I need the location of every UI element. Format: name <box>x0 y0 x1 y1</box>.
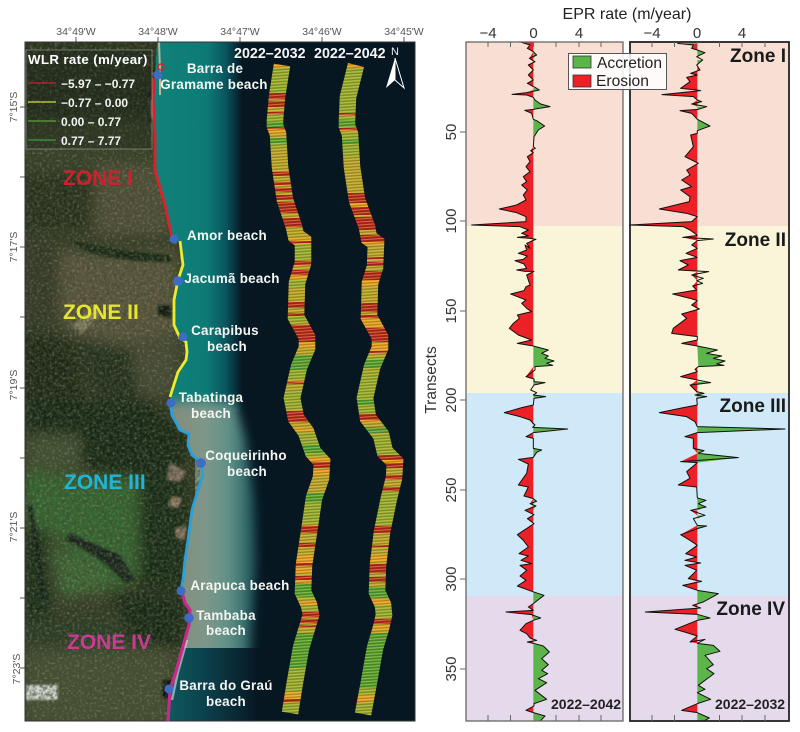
panel tag: 2022–2042 <box>551 696 621 712</box>
beach labels: beach <box>206 694 246 709</box>
beach labels: Gramame beach <box>160 77 268 92</box>
chart zone labels: Zone I <box>730 46 786 67</box>
zone labels on map: ZONE I <box>63 167 133 190</box>
zone labels on map: ZONE II <box>63 301 139 324</box>
panel tag: 2022–2032 <box>715 696 785 712</box>
beach labels: Jacumã beach <box>184 271 280 286</box>
frame and ticks <box>466 42 623 721</box>
water: southern strip <box>170 648 250 720</box>
longitude labels: 34°46'W <box>302 26 342 38</box>
chart legend: Erosion <box>596 73 649 90</box>
shoreline zone III <box>170 402 203 590</box>
map panel: satellite image of the coast <box>20 40 415 725</box>
legend: WLR rate: −0.77 – 0.00 <box>61 96 128 110</box>
chart title: EPR rate (m/year) <box>563 6 691 23</box>
latitude labels: 7°23'S <box>11 654 23 684</box>
chart x tick labels: −4 <box>479 25 497 42</box>
beach labels: Barra de <box>187 61 243 76</box>
chart x tick labels: 0 <box>693 25 701 42</box>
chart frame ticks: longitude <box>76 37 404 42</box>
longitude labels: 34°48'W <box>138 26 178 38</box>
chart zone labels: Zone II <box>725 230 786 251</box>
chart legend: Accretion <box>597 55 662 72</box>
land mosaic <box>20 40 200 725</box>
chart panel: 2022-2032 <box>629 42 789 721</box>
longitude labels: 34°45'W <box>384 26 424 38</box>
beach labels: Tabatinga <box>179 390 244 405</box>
y axis labels: 200 <box>443 387 460 413</box>
chart legend <box>568 54 666 90</box>
latitude labels: 7°21'S <box>8 512 20 542</box>
y axis labels: 250 <box>443 477 460 503</box>
chart x tick labels: 0 <box>529 25 538 42</box>
beach labels: Arapuca beach <box>190 578 290 593</box>
chart panel: 2022-2042 <box>460 42 623 721</box>
longitude labels: 34°49'W <box>56 26 96 38</box>
shoreline zone I <box>153 78 172 238</box>
north arrow: N <box>391 46 399 58</box>
chart zone labels <box>716 46 786 620</box>
beach labels: Coqueirinho <box>205 448 287 463</box>
chart zone labels: Zone III <box>720 396 786 417</box>
scenario titles on map: 2022–2032 <box>234 46 306 62</box>
y axis labels: 100 <box>443 208 460 234</box>
y axis labels: 50 <box>443 124 460 140</box>
transect lines 2022-2042 <box>338 63 404 715</box>
beach strip north <box>159 42 160 95</box>
chart x tick labels: 4 <box>738 25 746 42</box>
legend: WLR rate <box>26 50 152 149</box>
water: shallow teal north <box>150 42 242 412</box>
beach labels: Tambaba <box>196 608 256 623</box>
surf line south <box>172 640 187 700</box>
y axis labels: 150 <box>443 298 460 324</box>
water: sandy shallows south <box>165 402 256 670</box>
beach markers <box>154 70 206 694</box>
zone labels on map: ZONE III <box>64 471 146 494</box>
legend: WLR rate: WLR rate (m/year) <box>28 52 148 67</box>
small red marker <box>158 64 164 70</box>
frame and ticks <box>630 42 789 721</box>
shoreline zone IV <box>168 592 190 721</box>
latitude labels: 7°17'S <box>8 232 20 262</box>
transect lines 2022-2032 <box>266 64 330 714</box>
chart x tick labels: 4 <box>575 25 583 42</box>
beach labels: Carapibus <box>191 323 259 338</box>
longitude labels: 34°47'W <box>220 26 260 38</box>
latitude labels: 7°15'S <box>8 92 20 122</box>
beach labels: Amor beach <box>187 228 267 243</box>
shoreline zone II <box>170 241 187 397</box>
legend: WLR rate: 0.77 – 7.77 <box>61 134 121 148</box>
y axis labels <box>443 124 460 682</box>
scenario titles on map: 2022–2042 <box>314 46 386 62</box>
chart x tick labels: −4 <box>643 25 661 42</box>
transect band 2022-2032 <box>266 64 330 714</box>
legend: WLR rate: −5.97 – −0.77 <box>61 77 135 91</box>
latitude labels: 7°19'S <box>8 370 20 400</box>
y axis labels: 300 <box>443 566 460 592</box>
beach labels: beach <box>227 464 267 479</box>
transect band 2022-2042 <box>338 63 404 716</box>
latitude labels <box>8 92 23 684</box>
latitude ticks <box>20 107 25 668</box>
north arrow <box>386 46 404 88</box>
chart zone labels: Zone IV <box>716 599 785 620</box>
y axis labels: 350 <box>443 656 460 682</box>
map border <box>25 42 415 721</box>
beach labels: Barra do Graú <box>179 678 273 693</box>
beach labels: beach <box>191 406 231 421</box>
longitude labels <box>56 26 424 38</box>
scenario titles on map <box>234 46 386 62</box>
legend: WLR rate: 0.00 – 0.77 <box>61 115 121 129</box>
zone labels on map: ZONE IV <box>67 631 151 654</box>
beach labels: beach <box>207 339 247 354</box>
zone labels on map <box>63 167 151 654</box>
chart x tick labels <box>479 25 746 42</box>
y axis title: Transects <box>423 346 440 414</box>
beach labels: beach <box>206 623 246 638</box>
beach labels <box>160 61 290 709</box>
